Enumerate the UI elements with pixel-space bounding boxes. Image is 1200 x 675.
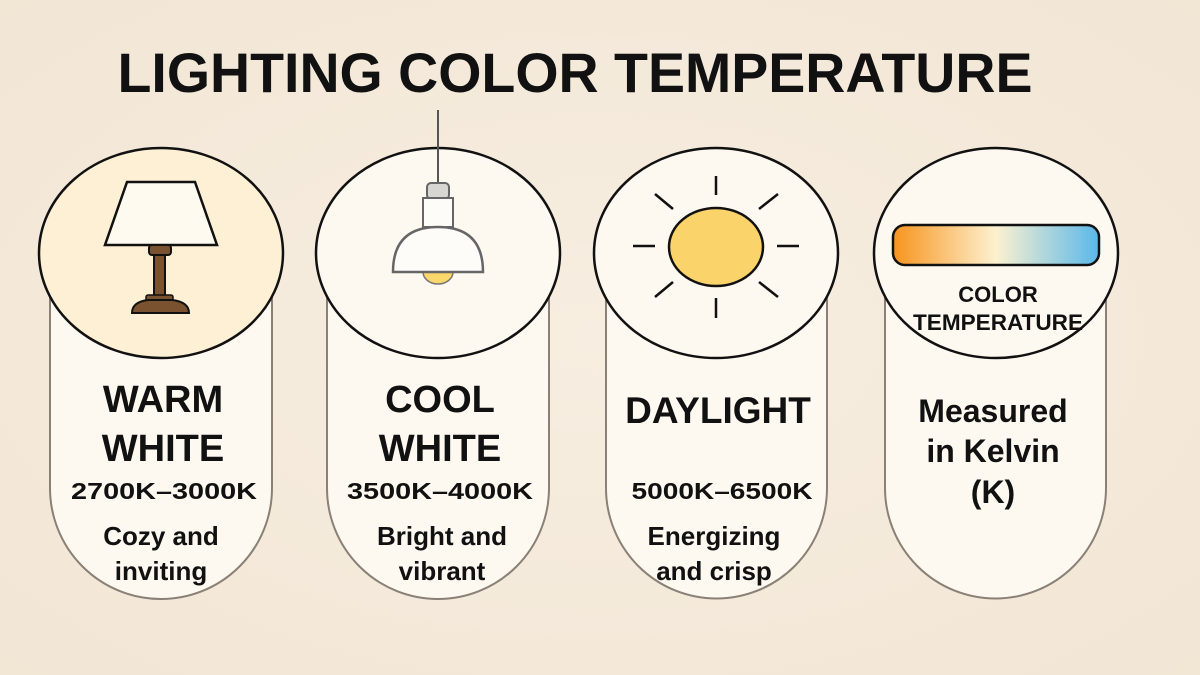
icon circle: color temperature bar: TEMPERATURE (913, 310, 1083, 335)
description: Energizing (648, 521, 780, 551)
description: measured in kelvin: Measured (918, 393, 1068, 429)
title: LIGHTING COLOR TEMPERATURE (118, 41, 1032, 104)
panel: kelvin: in Kelvin (926, 433, 1060, 469)
panel: cool white (316, 110, 560, 599)
heading: cool white: COOL (385, 379, 495, 421)
range: 3500K–4000K (347, 478, 533, 504)
panel: warm white: inviting (115, 556, 207, 586)
panel: cool white: vibrant (399, 556, 486, 586)
panel: warm white (39, 148, 283, 599)
heading: daylight: DAYLIGHT (625, 390, 811, 431)
range: 2700K–3000K (71, 478, 257, 504)
panel: warm white: WHITE (102, 428, 224, 470)
heading: warm white: WARM (103, 379, 223, 421)
icon circle: table lamp (39, 148, 283, 358)
description: Cozy and (103, 521, 219, 551)
icon circle: color temperature bar: COLOR (958, 282, 1038, 307)
panel: daylight (594, 148, 838, 598)
panel: cool white: WHITE (379, 428, 501, 470)
icon circle: color temperature bar (874, 148, 1118, 358)
icon circle: pendant lamp (316, 110, 560, 358)
range: 5000K–6500K (632, 478, 813, 504)
panel: daylight: and crisp (656, 556, 772, 586)
panel: kelvin: (K) (971, 474, 1015, 510)
description: Bright and (377, 521, 507, 551)
icon circle: sun (594, 148, 838, 358)
panel: kelvin (874, 148, 1118, 598)
